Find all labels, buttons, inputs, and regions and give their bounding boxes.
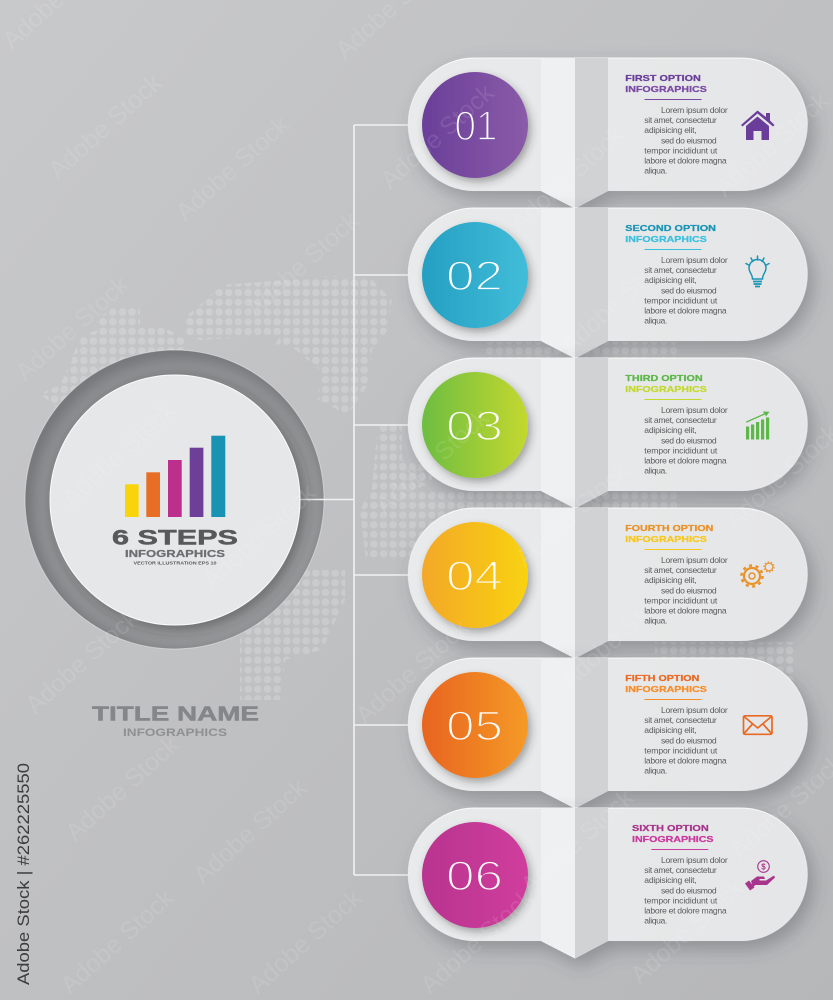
watermarks: Adobe Stock: [10, 270, 135, 386]
watermarks: Adobe Stock: [515, 783, 640, 899]
icon: hand holding coin: $: [761, 862, 766, 872]
card body: [408, 58, 808, 208]
option heading: FOURTH OPTION: [625, 524, 713, 533]
connector lines: [300, 125, 410, 875]
number badge 03: 03: [446, 402, 503, 449]
underline: [651, 849, 708, 850]
watermarks: Adobe Stock: [243, 883, 368, 999]
body text: labore et dolore magna: [644, 906, 727, 916]
option heading: [625, 524, 713, 544]
panel: step 04: [408, 508, 808, 658]
watermarks: Adobe Stock: [60, 730, 185, 846]
body text: sed do eiusmod: [661, 885, 717, 895]
panel: step 01: [408, 58, 808, 208]
body text: Lorem ipsum dolor: [661, 555, 728, 565]
fold: [541, 508, 608, 658]
fold: [541, 808, 608, 958]
watermarks: Adobe Stock: [510, 456, 635, 572]
body text: [644, 105, 728, 176]
fold: [541, 208, 608, 358]
fold: [541, 58, 608, 208]
caption: vector illustration: VECTOR ILLUSTRATION EPS 10: [134, 560, 217, 566]
number badge 05: 05: [446, 702, 503, 749]
icon: hand holding coin: [745, 861, 775, 890]
option heading: [632, 824, 714, 844]
watermarks: Adobe Stock: [188, 773, 313, 889]
card body: [408, 358, 808, 508]
body text: aliqua.: [644, 166, 667, 176]
inner disc: [50, 375, 300, 625]
option heading: [625, 224, 716, 244]
option heading: SIXTH OPTION: [632, 824, 709, 833]
watermarks: Adobe Stock: [375, 78, 500, 194]
body text: adipisicing elit,: [644, 275, 697, 285]
body text: tempor incididunt ut: [644, 146, 718, 156]
underline: [644, 99, 702, 100]
heading: 6 steps: 6 STEPS: [112, 526, 238, 550]
option heading: [625, 74, 707, 94]
connector stub: [300, 498, 325, 500]
option heading: INFOGRAPHICS: [632, 835, 714, 844]
body text: sed do eiusmod: [661, 585, 717, 595]
body text: sit amet, consectetur: [644, 565, 717, 575]
icon: light bulb: [746, 256, 769, 286]
body text: sed do eiusmod: [661, 435, 717, 445]
card body: [408, 508, 808, 658]
body text: Lorem ipsum dolor: [661, 255, 728, 265]
option heading: FIFTH OPTION: [625, 674, 699, 683]
body text: adipisicing elit,: [644, 875, 697, 885]
number badge 05: [422, 672, 528, 778]
panel: step 02: [408, 208, 808, 358]
watermarks: Adobe Stock: [710, 86, 833, 202]
bar chart: [125, 436, 225, 517]
body text: aliqua.: [644, 766, 667, 776]
watermarks: Adobe Stock: [350, 613, 475, 729]
body text: labore et dolore magna: [644, 156, 727, 166]
body text: [644, 255, 728, 326]
circle ring: [24, 349, 332, 657]
subheading: infographics: INFOGRAPHICS: [125, 548, 225, 560]
body text: sed do eiusmod: [661, 735, 717, 745]
body text: labore et dolore magna: [644, 756, 727, 766]
number badge 03: [422, 372, 528, 478]
body text: tempor incididunt ut: [644, 746, 718, 756]
watermarks: Adobe Stock: [43, 68, 168, 184]
watermarks: Adobe Stock: [197, 478, 322, 594]
body text: Lorem ipsum dolor: [661, 405, 728, 415]
watermarks: Adobe Stock: [370, 403, 495, 519]
option heading: FIRST OPTION: [625, 74, 701, 83]
underline: [644, 249, 702, 250]
card body: [408, 208, 808, 358]
watermarks: Adobe Stock: [55, 883, 180, 999]
body text: sit amet, consectetur: [644, 415, 717, 425]
body text: adipisicing elit,: [644, 125, 697, 135]
fold: [541, 658, 608, 808]
body text: Lorem ipsum dolor: [661, 855, 728, 865]
body text: tempor incididunt ut: [644, 896, 718, 906]
body text: [644, 555, 728, 626]
panel: step 05: [408, 658, 808, 808]
body text: aliqua.: [644, 916, 667, 926]
underline: [644, 699, 702, 700]
body text: tempor incididunt ut: [644, 446, 718, 456]
body text: sed do eiusmod: [661, 135, 717, 145]
option heading: INFOGRAPHICS: [625, 385, 707, 394]
watermarks: Adobe Stock: [170, 110, 295, 226]
body text: tempor incididunt ut: [644, 596, 718, 606]
body text: aliqua.: [644, 316, 667, 326]
icon: growth chart: [746, 412, 770, 440]
watermarks: Adobe Stock: [20, 603, 145, 719]
number badge 01: 01: [454, 102, 498, 149]
title subheading: INFOGRAPHICS: [123, 727, 227, 739]
option heading: INFOGRAPHICS: [625, 235, 707, 244]
option heading: [625, 374, 707, 394]
number badge 04: [422, 522, 528, 628]
dotted world map: [40, 276, 795, 700]
number badge 06: [422, 822, 528, 928]
number badge 02: [422, 222, 528, 328]
body text: labore et dolore magna: [644, 456, 727, 466]
body text: aliqua.: [644, 466, 667, 476]
icon: gears: [742, 562, 774, 586]
body text: sit amet, consectetur: [644, 865, 717, 875]
watermarks: Adobe Stock: [625, 873, 750, 989]
card body: [408, 658, 808, 808]
body text: Lorem ipsum dolor: [661, 705, 728, 715]
watermarks: Adobe Stock: [555, 578, 680, 694]
icon: house: [741, 110, 774, 140]
underline: [644, 549, 702, 550]
number badge 02: 02: [446, 252, 503, 299]
body text: sit amet, consectetur: [644, 715, 717, 725]
side credit text: Adobe Stock | #262225550: [15, 763, 33, 985]
body text: aliqua.: [644, 616, 667, 626]
title name: TITLE NAME: [92, 702, 259, 726]
body text: labore et dolore magna: [644, 306, 727, 316]
watermarks: Adobe Stock: [505, 120, 630, 236]
body text: adipisicing elit,: [644, 725, 697, 735]
body text: Lorem ipsum dolor: [661, 105, 728, 115]
body text: [644, 855, 728, 926]
body text: adipisicing elit,: [644, 425, 697, 435]
panel: step 03: [408, 358, 808, 508]
watermarks: Adobe Stock: [57, 396, 182, 512]
body text: labore et dolore magna: [644, 606, 727, 616]
body text: sit amet, consectetur: [644, 265, 717, 275]
option heading: [625, 674, 707, 694]
option heading: THIRD OPTION: [625, 374, 703, 383]
body text: [644, 405, 728, 476]
panel: step 06: [408, 808, 808, 958]
option heading: INFOGRAPHICS: [625, 685, 707, 694]
body text: sed do eiusmod: [661, 285, 717, 295]
watermarks: Adobe Stock: [415, 883, 540, 999]
option heading: INFOGRAPHICS: [625, 535, 707, 544]
option heading: SECOND OPTION: [625, 224, 716, 233]
body text: adipisicing elit,: [644, 575, 697, 585]
body text: tempor incididunt ut: [644, 296, 718, 306]
watermarks: Adobe Stock: [240, 206, 365, 322]
number badge 04: 04: [446, 552, 503, 599]
fold: [541, 358, 608, 508]
card body: [408, 808, 808, 958]
number badge 06: 06: [446, 852, 503, 899]
watermarks: Adobe Stock: [555, 243, 680, 359]
body text: sit amet, consectetur: [644, 115, 717, 125]
body text: [644, 705, 728, 776]
icon: envelope: [744, 716, 772, 734]
underline: [644, 399, 702, 400]
central circle: [24, 349, 332, 657]
option heading: INFOGRAPHICS: [625, 85, 707, 94]
number badge 01: [422, 72, 528, 178]
